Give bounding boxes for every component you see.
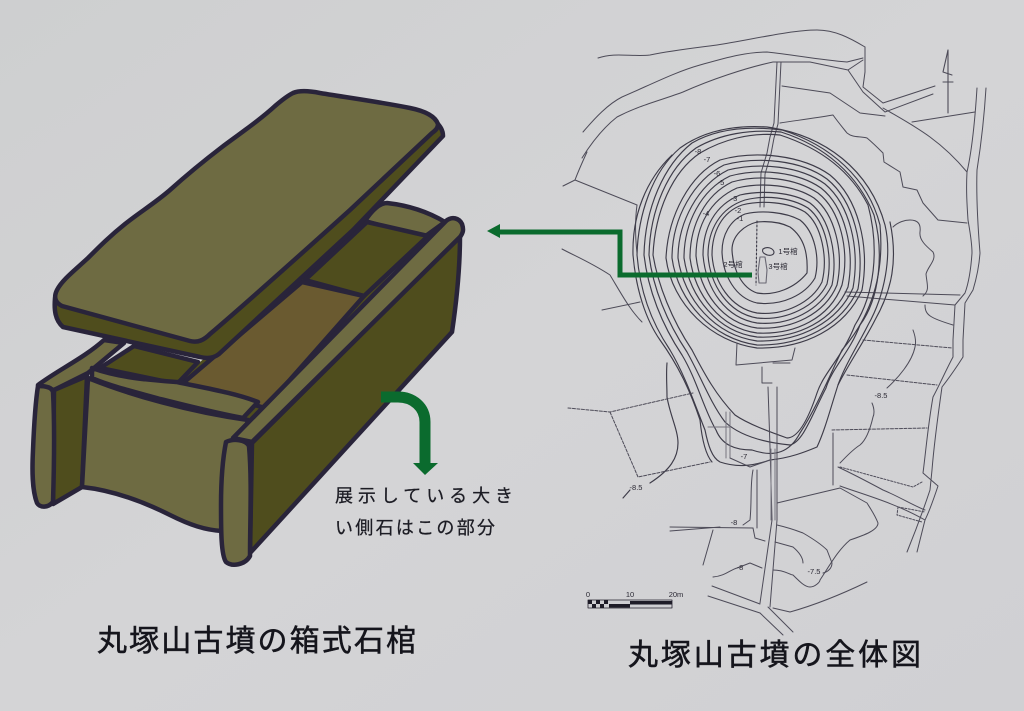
- map labels: 20m: [669, 590, 683, 599]
- site map of the burial mound: [562, 30, 986, 635]
- burial features on the summit: [756, 221, 774, 285]
- caption: side stone note: い側石はこの部分: [335, 518, 495, 538]
- map labels: [586, 147, 887, 599]
- lid top: [55, 91, 438, 342]
- arrow: to side stone: [381, 397, 438, 475]
- map labels: 1号棺: [778, 246, 798, 256]
- map labels: -7.5: [808, 567, 820, 576]
- north arrow: [943, 50, 953, 113]
- caption: side stone note: 展示している大き: [335, 486, 513, 506]
- map labels: -8: [737, 563, 743, 572]
- map labels: -5: [718, 178, 724, 187]
- map labels: -6: [714, 169, 720, 178]
- map labels: 3号棺: [768, 261, 788, 271]
- right long stone outer face: [250, 236, 460, 553]
- map labels: -3: [731, 194, 737, 203]
- coffin interior base: [92, 215, 430, 425]
- left long stone top: [38, 340, 124, 390]
- left end stone: [32, 386, 54, 507]
- map labels: -8: [695, 147, 701, 156]
- back end stone: [365, 203, 445, 238]
- scale bar: [588, 600, 672, 608]
- front end panel top: [92, 368, 258, 418]
- illustration: box-style stone coffin: [32, 91, 463, 565]
- floor: back dark section: [305, 222, 428, 296]
- map labels: -7: [704, 155, 710, 164]
- heading: site map: 丸塚山古墳の全体図: [628, 639, 921, 672]
- lid underside: [55, 122, 443, 358]
- map labels: 0: [586, 590, 590, 599]
- left long stone inner face: [53, 376, 87, 504]
- map labels: -8: [731, 518, 737, 527]
- arrow: from mound to coffin: [487, 224, 752, 275]
- map labels: 10: [626, 590, 634, 599]
- floor: brown exposed section: [182, 282, 364, 408]
- front right end stone: [221, 440, 251, 565]
- boundary roads and lots: [562, 30, 986, 552]
- front end panel face: [82, 378, 248, 531]
- map labels: -8.5: [630, 483, 642, 492]
- right long stone top: [233, 218, 463, 442]
- map labels: 2号棺: [723, 259, 743, 269]
- map labels: -4: [703, 209, 709, 218]
- lower map: roads and lots: [568, 330, 952, 635]
- caption: side stone note: [335, 486, 513, 538]
- contour rings: [623, 127, 894, 498]
- map labels: -1: [737, 214, 743, 223]
- floor: front dark section: [100, 346, 198, 384]
- map labels: -8.5: [875, 391, 887, 400]
- map labels: -2: [735, 206, 741, 215]
- map labels: -7: [741, 452, 747, 461]
- heading: coffin: 丸塚山古墳の箱式石棺: [97, 625, 416, 658]
